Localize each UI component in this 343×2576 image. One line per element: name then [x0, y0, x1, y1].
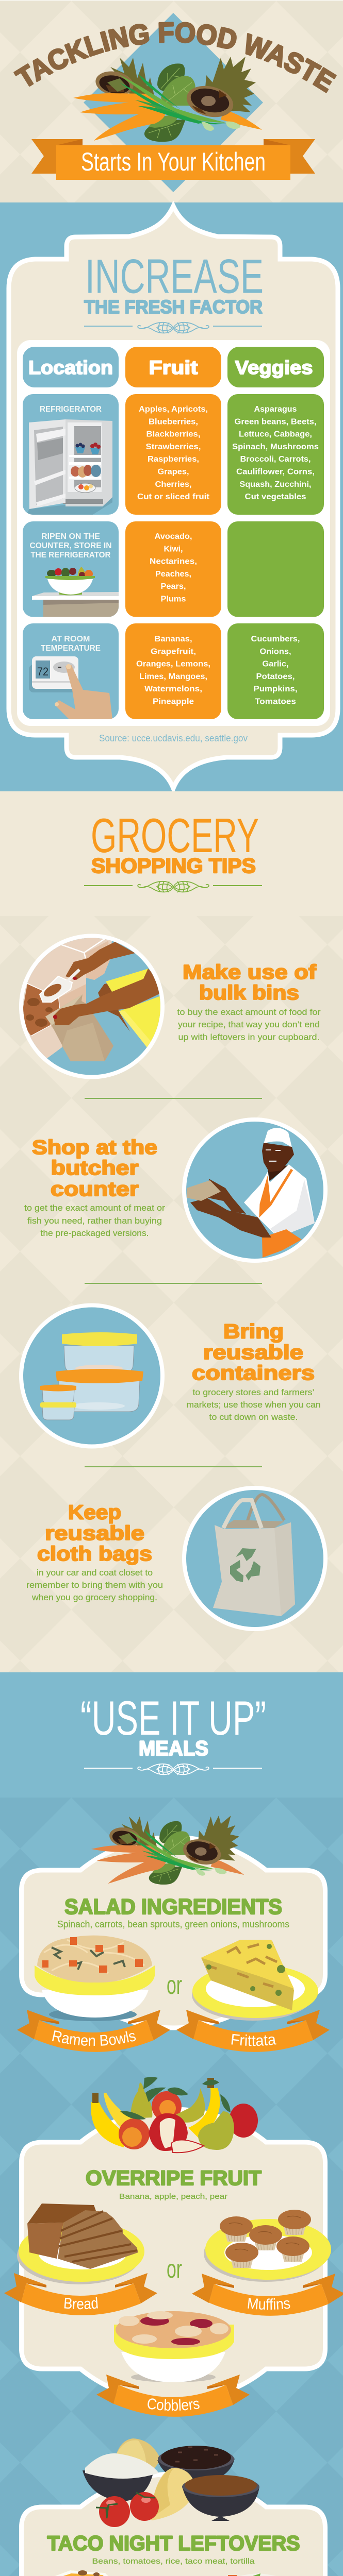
icon: sliced bread on plate — [17, 2204, 144, 2284]
ribbon: frittata — [176, 2010, 330, 2052]
tip heading — [183, 961, 317, 1004]
row: refrigerator: Strawberries, — [145, 443, 201, 451]
icon: muffins on plate — [204, 2210, 331, 2282]
row: refrigerator: Grapes, — [158, 468, 189, 476]
icon: open refrigerator — [26, 419, 112, 515]
tip heading: containers — [192, 1362, 315, 1384]
tip text — [24, 1203, 165, 1238]
row: ripen on the counter: Peaches, — [155, 570, 191, 579]
title ribbon: Starts In Your Kitchen — [81, 147, 266, 176]
tip heading: cloth bags — [37, 1543, 152, 1565]
tip text — [187, 1387, 321, 1422]
tip: reusable containers — [19, 1303, 321, 1449]
tip heading — [32, 1137, 157, 1200]
tip text: to grocery stores and farmers’ — [193, 1387, 315, 1397]
row: at room temperature: Bananas, — [155, 635, 192, 643]
icon: mexican casserole — [28, 2570, 153, 2576]
row: refrigerator: Squash, Zucchini, — [239, 480, 312, 489]
row: at room temperature: Pineapple — [153, 698, 194, 706]
flourish divider — [84, 323, 262, 333]
icon: frittata on plate — [192, 1940, 318, 2021]
tip text: the pre-packaged versions. — [40, 1228, 149, 1238]
source: Source: ucce.ucdavis.edu, seattle.gov — [99, 733, 248, 743]
tip text: to cut down on waste. — [209, 1412, 298, 1422]
ribbon: bread: Bread — [64, 2297, 98, 2309]
icon: cobbler bowl — [114, 2311, 234, 2382]
column headers: Fruit — [149, 357, 198, 378]
tip text: remember to bring them with you — [26, 1580, 163, 1590]
row: at room temperature: Pumpkins, — [254, 685, 297, 693]
ribbon: frittata: Frittata — [231, 2034, 276, 2046]
row: ripen on the counter: Kiwi, — [164, 545, 183, 553]
panel: overripe fruit — [4, 2077, 343, 2417]
row: at room temperature: Garlic, — [262, 660, 289, 669]
heading: increase: INCREASE — [85, 249, 264, 303]
row: ripen on the counter: Plums — [161, 595, 186, 604]
tip heading: Make use of — [183, 961, 317, 984]
row: at room temperature — [23, 623, 324, 719]
flourish divider — [84, 882, 262, 892]
icon: thermostat and hand — [29, 656, 112, 719]
row: ripen on the counter: Nectarines, — [150, 557, 197, 566]
tip heading: reusable — [203, 1342, 303, 1364]
label: or: or — [167, 1971, 182, 1999]
flourish divider — [84, 1764, 262, 1775]
ribbon: muffins: Muffins — [248, 2298, 290, 2310]
panel heading: SALAD INGREDIENTS — [64, 1894, 282, 1919]
column headers: Location — [28, 357, 113, 378]
row: refrigerator: Lettuce, Cabbage, — [239, 430, 312, 439]
panel heading: TACO NIGHT LEFTOVERS — [47, 2532, 300, 2555]
tip text: up with leftovers in your cupboard. — [178, 1032, 320, 1042]
row: refrigerator: Blueberries, — [149, 417, 198, 426]
row: refrigerator: Spinach, Mushrooms — [232, 443, 319, 451]
header section — [0, 0, 343, 192]
tip: bulk bins — [19, 933, 321, 1082]
section: grocery shopping tips — [19, 791, 328, 1631]
tip: cloth bags — [26, 1486, 328, 1631]
heading: shopping tips: SHOPPING TIPS — [91, 855, 256, 877]
row: at room temperature: Oranges, Lemons, — [136, 660, 210, 669]
row: ripen on the counter: THE REFRIGERATOR — [31, 551, 110, 560]
heading: the fresh factor: THE FRESH FACTOR — [84, 296, 263, 317]
row: at room temperature: AT ROOM — [52, 635, 90, 643]
panel: taco night leftovers — [19, 2438, 328, 2576]
row: ripen on the counter: Pears, — [161, 582, 186, 591]
ribbon: ramen bowls: Ramen Bowls — [52, 2030, 136, 2046]
row: ripen on the counter — [23, 521, 324, 617]
row: at room temperature: Grapefruit, — [151, 647, 196, 656]
icon: recycling symbol — [230, 1548, 260, 1582]
row: refrigerator: REFRIGERATOR — [40, 405, 102, 414]
row: refrigerator: Cherries, — [155, 480, 192, 489]
label: or: or — [167, 2255, 182, 2283]
icon: burrito bowl — [193, 2573, 314, 2576]
icon: vegetable bouquet — [73, 57, 262, 142]
ribbon: muffins — [192, 2274, 343, 2316]
row: at room temperature: Watermelons, — [144, 685, 202, 693]
row: refrigerator: Apples, Apricots, — [139, 405, 208, 414]
heading: use it up: “USE IT UP” — [80, 1691, 266, 1745]
icon: fruit pile — [91, 2077, 258, 2153]
panel: increase the fresh factor — [0, 202, 343, 791]
icon: thermostat and hand: 72 — [37, 665, 48, 678]
ingredients: Spinach, carrots, bean sprouts, green onions, mushrooms — [57, 1919, 289, 1929]
heading: grocery: GROCERY — [91, 808, 259, 862]
row: refrigerator: Cauliflower, Corns, — [236, 468, 315, 476]
row: refrigerator — [23, 394, 324, 515]
row: ripen on the counter: RIPEN ON THE — [41, 532, 100, 541]
row: refrigerator: Blackberries, — [146, 430, 200, 439]
tip heading: counter — [51, 1178, 139, 1200]
table — [17, 340, 330, 726]
row: at room temperature: Tomatoes — [255, 698, 296, 706]
row: refrigerator: Green beans, Beets, — [234, 417, 317, 426]
row: refrigerator: Asparagus — [254, 405, 297, 414]
tip text — [26, 1568, 163, 1602]
tip text: to get the exact amount of meat or — [24, 1203, 165, 1213]
row: ripen on the counter: COUNTER, STORE IN — [30, 541, 111, 550]
ribbon: ramen bowls — [17, 2010, 170, 2052]
tip text: fish you need, rather than buying — [27, 1216, 162, 1226]
panel heading: OVERRIPE FRUIT — [86, 2167, 262, 2190]
ribbon: bread — [4, 2273, 157, 2315]
section: use it up meals — [0, 1672, 343, 2576]
blue diamond — [84, 13, 263, 192]
tip heading — [192, 1321, 315, 1384]
icon: butcher — [183, 1118, 328, 1262]
icon: fruit bowl on counter — [32, 567, 119, 617]
ingredients: Banana, apple, peach, pear — [119, 2192, 227, 2201]
row: at room temperature: Potatoes, — [256, 672, 295, 681]
icon: taco ingredients — [83, 2438, 259, 2527]
title: TACKLING FOOD WASTE — [13, 22, 337, 93]
tip heading: reusable — [45, 1522, 144, 1545]
icon: reusable cloth bag — [183, 1486, 328, 1631]
icon: food containers — [21, 1303, 165, 1448]
tip heading: Bring — [223, 1321, 284, 1343]
column headers — [23, 347, 324, 387]
row: at room temperature: TEMPERATURE — [41, 644, 101, 653]
row: at room temperature: Onions, — [260, 647, 291, 656]
tip text: when you go grocery shopping. — [31, 1592, 157, 1602]
tip heading: Shop at the — [32, 1137, 157, 1159]
tip heading: Keep — [68, 1502, 121, 1524]
tip heading: bulk bins — [199, 982, 299, 1004]
icon: scooping from bulk bins — [23, 938, 160, 1075]
tip text: your recipe, that way you don’t end — [178, 1020, 320, 1029]
tip text — [177, 1007, 321, 1042]
row: refrigerator: Cut or sliced fruit — [137, 493, 210, 501]
row: ripen on the counter: Avocado, — [155, 532, 192, 541]
title ribbon — [31, 139, 315, 180]
row: at room temperature: Limes, Mangoes, — [139, 672, 207, 681]
row: refrigerator: Cut vegetables — [244, 493, 306, 501]
tip text: markets; use those when you can — [187, 1400, 321, 1410]
ribbon: cobblers — [96, 2375, 250, 2417]
row: at room temperature: Cucumbers, — [251, 635, 300, 643]
icon: salad vegetables — [91, 1816, 244, 1885]
tip heading — [37, 1502, 152, 1565]
tip text: to buy the exact amount of food for — [177, 1007, 321, 1017]
heading: meals: MEALS — [139, 1737, 208, 1760]
ribbon: cobblers: Cobblers — [148, 2398, 200, 2411]
tip: butcher counter — [24, 1117, 328, 1263]
row: refrigerator: Raspberries, — [148, 455, 199, 464]
ingredients: Beans, tomatoes, rice, taco meat, tortilla — [92, 2557, 255, 2566]
icon: ramen bowl — [35, 1936, 155, 2021]
row: refrigerator: Broccoli, Carrots, — [240, 455, 311, 464]
panel: salad ingredients — [17, 1816, 330, 2052]
column headers: Veggies — [235, 357, 313, 378]
tip heading: butcher — [51, 1157, 138, 1179]
tip text: in your car and coat closet to — [37, 1568, 153, 1578]
